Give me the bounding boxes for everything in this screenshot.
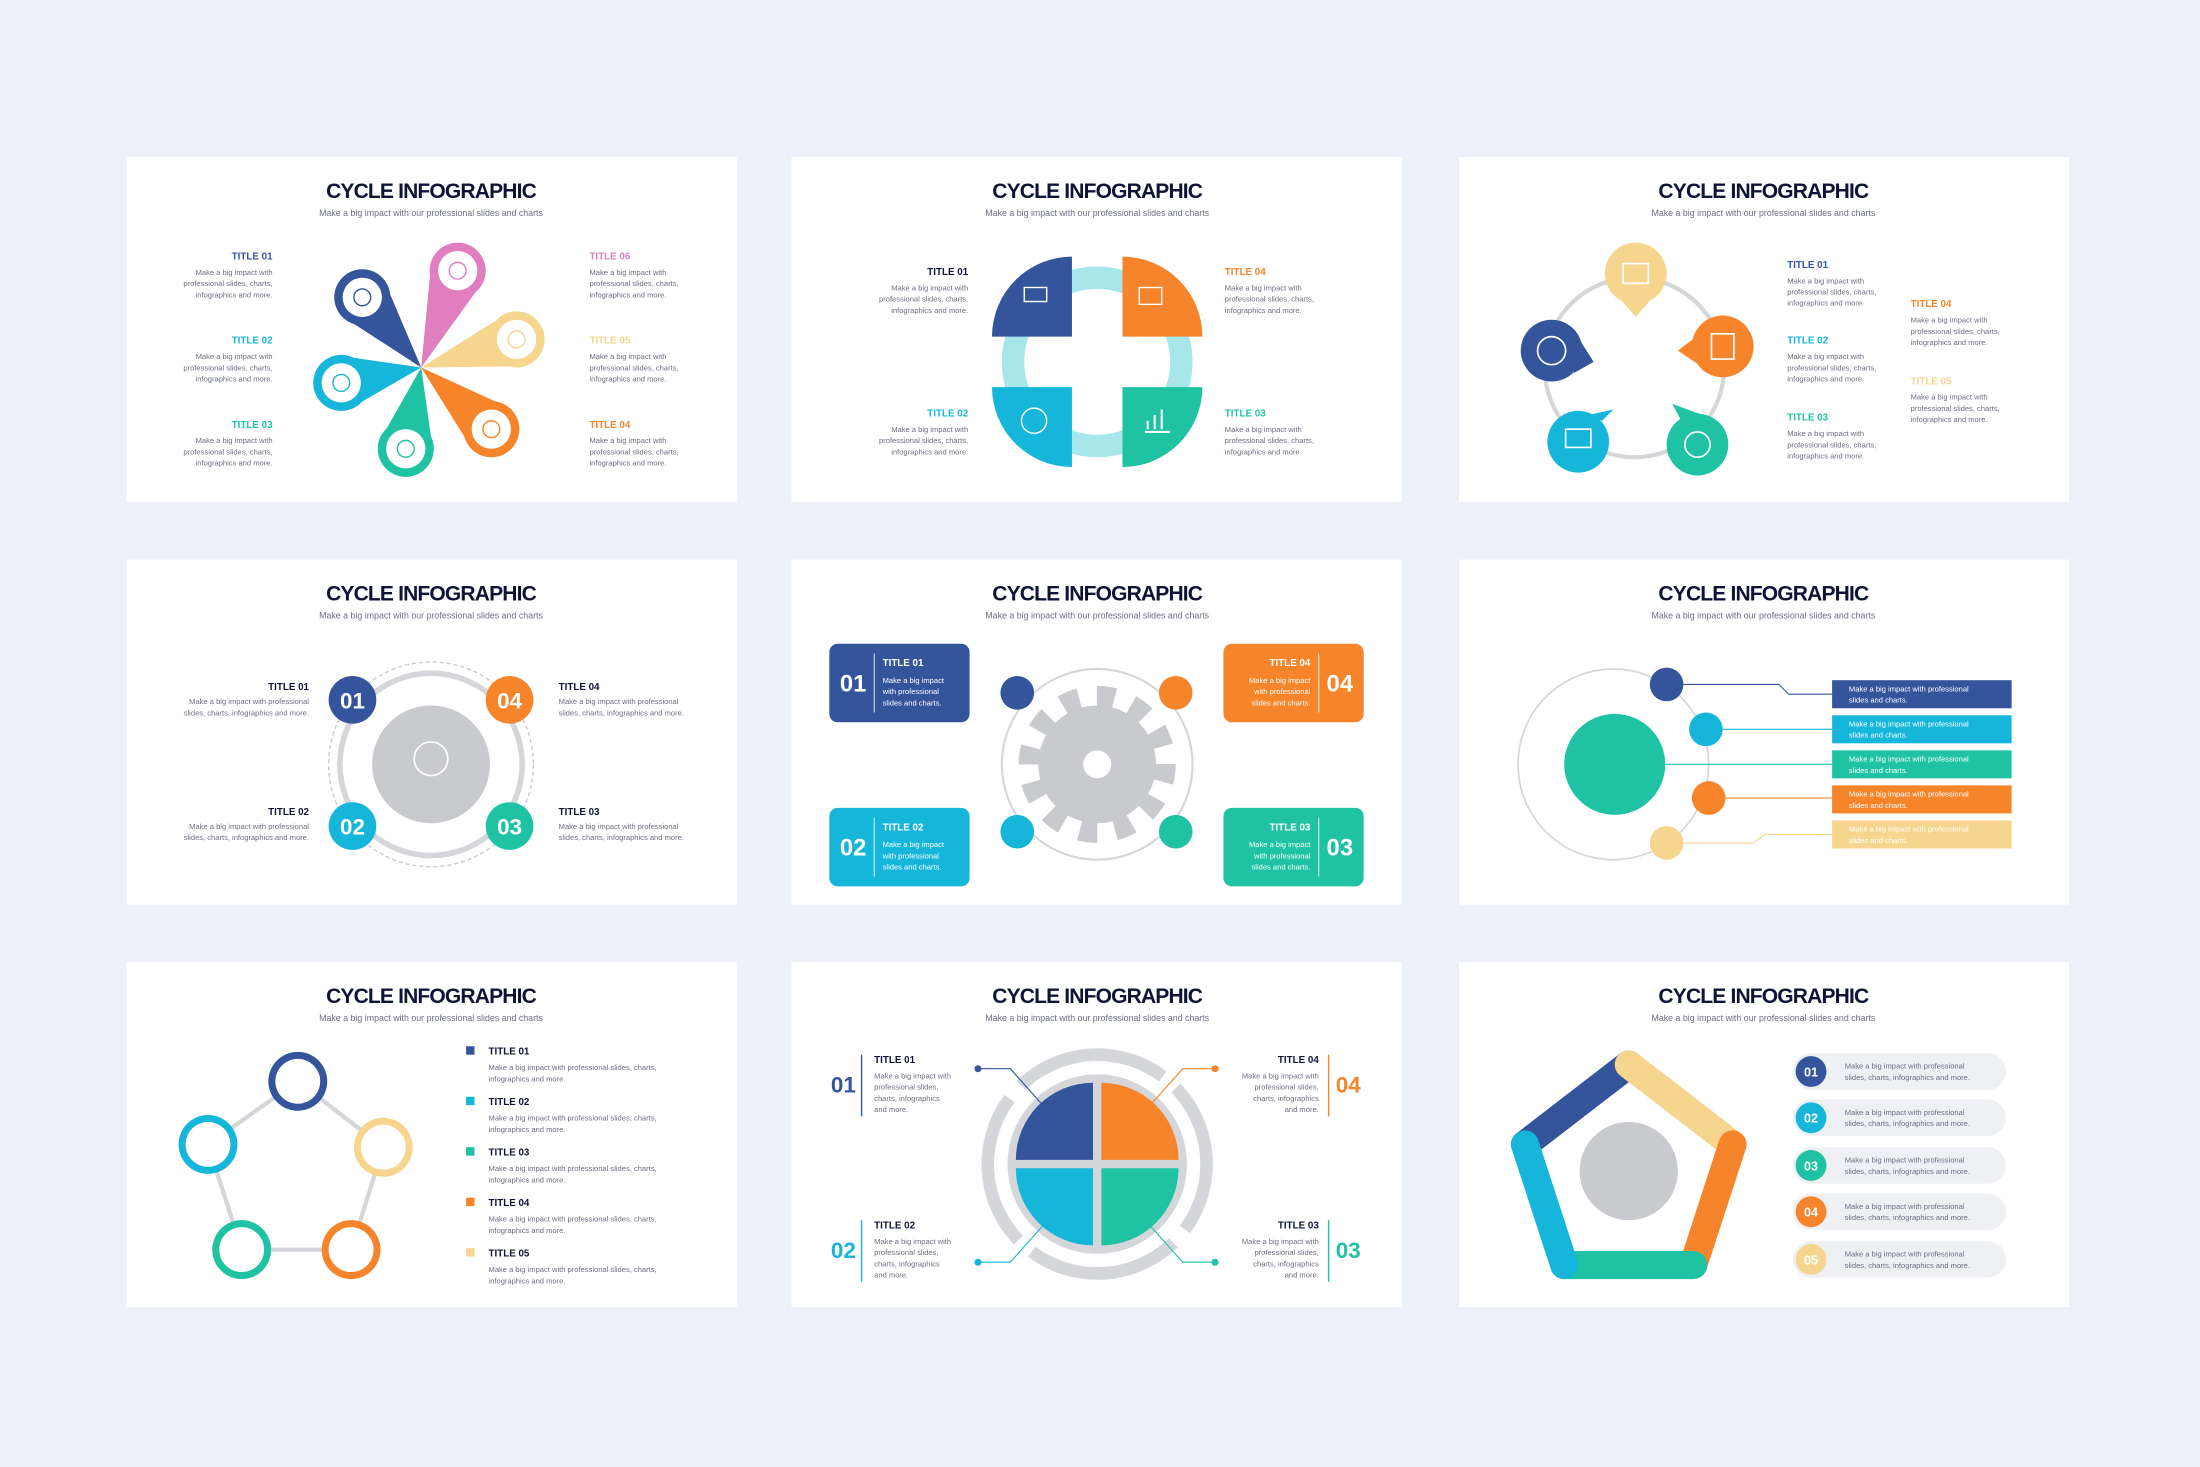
pill list: 03 bbox=[1804, 1159, 1818, 1173]
pill list: Make a big impact with professional bbox=[1845, 1202, 1965, 1211]
panel: slide 5 gear bbox=[791, 560, 1402, 905]
pill list: slides, charts, infographics and more. bbox=[1845, 1261, 1970, 1270]
text blocks: professional slides, charts, bbox=[1225, 295, 1314, 304]
text blocks: Make a big impact with bbox=[1242, 1237, 1319, 1246]
subtitle: Make a big impact with our professional slides and charts bbox=[985, 1013, 1210, 1023]
text blocks: Make a big impact with bbox=[874, 1237, 951, 1246]
text blocks: infographics and more. bbox=[891, 306, 968, 315]
box 01: slides and charts. bbox=[883, 698, 941, 707]
text blocks: professional slides, charts, bbox=[1911, 327, 2000, 336]
left text blocks bbox=[183, 251, 273, 468]
text blocks: TITLE 03 bbox=[1225, 409, 1266, 420]
text blocks: infographics and more. bbox=[891, 447, 968, 456]
right text blocks: infographics and more. bbox=[589, 459, 666, 468]
text blocks bbox=[831, 1055, 1361, 1282]
right text blocks: Make a big impact with bbox=[589, 352, 666, 361]
pill list: 01 bbox=[1804, 1065, 1818, 1079]
list: Make a big impact with professional slides, charts, bbox=[489, 1215, 657, 1224]
panel: slide 6 bars bbox=[1459, 560, 2069, 905]
pill list: slides, charts, infographics and more. bbox=[1845, 1119, 1970, 1128]
bars: slides and charts. bbox=[1849, 766, 1908, 775]
text blocks: TITLE 02 bbox=[927, 409, 969, 420]
pill list: 04 bbox=[1804, 1206, 1818, 1220]
title: CYCLE INFOGRAPHIC bbox=[1658, 985, 1869, 1008]
list: TITLE 03 bbox=[489, 1148, 530, 1159]
box 02: slides and charts. bbox=[883, 863, 941, 872]
text blocks: and more. bbox=[1285, 1271, 1319, 1280]
text blocks: professional slides, charts, bbox=[1911, 404, 2000, 413]
list: infographics and more. bbox=[489, 1175, 565, 1184]
text blocks: TITLE 04 bbox=[1225, 267, 1266, 278]
text blocks: slides, charts, infographics and more. bbox=[559, 833, 684, 842]
left text blocks: TITLE 02 bbox=[232, 336, 273, 347]
text blocks: TITLE 01 bbox=[927, 267, 969, 278]
box 04: 04 bbox=[1327, 670, 1354, 697]
left text blocks: infographics and more. bbox=[196, 459, 273, 468]
text blocks: professional slides, bbox=[1254, 1248, 1319, 1257]
list: Make a big impact with professional slides, charts, bbox=[489, 1164, 657, 1173]
list: infographics and more. bbox=[489, 1125, 565, 1134]
text blocks: TITLE 04 bbox=[1278, 1055, 1319, 1066]
circle diagram: 01 bbox=[340, 688, 365, 713]
text blocks: professional slides, charts, bbox=[1787, 440, 1876, 449]
box 04 bbox=[1223, 644, 1364, 722]
text blocks: and more. bbox=[874, 1105, 908, 1114]
right text blocks: professional slides, charts, bbox=[589, 447, 679, 456]
pentagon bbox=[179, 1052, 413, 1279]
panel: slide 9 pentagon ring bbox=[1459, 962, 2069, 1307]
bars: Make a big impact with professional bbox=[1849, 790, 1969, 799]
title: CYCLE INFOGRAPHIC bbox=[326, 985, 537, 1008]
list: TITLE 02 bbox=[489, 1097, 530, 1108]
list: infographics and more. bbox=[489, 1226, 565, 1235]
title: CYCLE INFOGRAPHIC bbox=[992, 180, 1203, 203]
text blocks: professional slides, bbox=[1254, 1083, 1319, 1092]
text blocks: TITLE 01 bbox=[874, 1055, 916, 1066]
left text blocks: Make a big impact with bbox=[196, 436, 273, 445]
box 04: TITLE 04 bbox=[1270, 658, 1311, 669]
right text blocks: Make a big impact with bbox=[589, 436, 666, 445]
text blocks: Make a big impact with bbox=[1787, 429, 1864, 438]
box 03: slides and charts. bbox=[1252, 863, 1310, 872]
pill list: slides, charts, infographics and more. bbox=[1845, 1167, 1970, 1176]
text blocks: professional slides, charts, bbox=[879, 295, 968, 304]
bars: Make a big impact with professional bbox=[1849, 825, 1969, 834]
left text blocks: Make a big impact with bbox=[196, 268, 273, 277]
gear bbox=[1000, 669, 1193, 860]
bars: slides and charts. bbox=[1849, 801, 1908, 810]
circle diagram: 04 bbox=[497, 688, 523, 713]
text blocks: 04 bbox=[1336, 1073, 1361, 1098]
box 03: Make a big impact bbox=[1249, 840, 1311, 849]
subtitle: Make a big impact with our professional slides and charts bbox=[1651, 1013, 1876, 1023]
text blocks: professional slides, charts, bbox=[1787, 288, 1876, 297]
text blocks: Make a big impact with bbox=[891, 283, 968, 292]
text blocks: charts, infographics bbox=[1253, 1259, 1319, 1268]
bars: Make a big impact with professional bbox=[1849, 755, 1969, 764]
pentagon ring bbox=[1525, 1064, 1733, 1265]
pill list: slides, charts, infographics and more. bbox=[1845, 1213, 1970, 1222]
list: Make a big impact with professional slides, charts, bbox=[489, 1063, 657, 1072]
pill list: 02 bbox=[1804, 1112, 1818, 1126]
subtitle: Make a big impact with our professional slides and charts bbox=[319, 1013, 543, 1023]
right text blocks: Make a big impact with bbox=[589, 268, 666, 277]
right text blocks: TITLE 05 bbox=[589, 336, 631, 347]
right text blocks: infographics and more. bbox=[589, 290, 666, 299]
text blocks: Make a big impact with bbox=[874, 1072, 951, 1081]
list bbox=[466, 1046, 657, 1285]
left text blocks: TITLE 03 bbox=[232, 420, 273, 431]
box 04: Make a big impact bbox=[1249, 676, 1311, 685]
text blocks: TITLE 02 bbox=[1787, 336, 1829, 347]
text blocks: TITLE 01 bbox=[268, 682, 310, 693]
box 02: Make a big impact bbox=[883, 840, 945, 849]
pill list: Make a big impact with professional bbox=[1845, 1062, 1965, 1071]
text blocks: TITLE 04 bbox=[559, 682, 600, 693]
title: CYCLE INFOGRAPHIC bbox=[992, 985, 1203, 1008]
text blocks: infographics and more. bbox=[1225, 447, 1302, 456]
text blocks: TITLE 03 bbox=[1787, 413, 1829, 424]
left text blocks: Make a big impact with bbox=[196, 352, 273, 361]
text blocks: Make a big impact with bbox=[1911, 316, 1988, 325]
circle diagram: 03 bbox=[497, 814, 522, 839]
text blocks: TITLE 02 bbox=[268, 807, 310, 818]
subtitle: Make a big impact with our professional slides and charts bbox=[1651, 208, 1876, 218]
pill list: slides, charts, infographics and more. bbox=[1845, 1073, 1970, 1082]
right text blocks: professional slides, charts, bbox=[589, 279, 679, 288]
text blocks: TITLE 02 bbox=[874, 1221, 916, 1232]
text blocks: infographics and more. bbox=[1911, 415, 1988, 424]
box 01 bbox=[829, 644, 970, 722]
text blocks: slides, charts, infographics and more. bbox=[184, 708, 309, 717]
text blocks: professional slides, charts, bbox=[1787, 363, 1876, 372]
text blocks: infographics and more. bbox=[1225, 306, 1302, 315]
title: CYCLE INFOGRAPHIC bbox=[1658, 180, 1869, 203]
title: CYCLE INFOGRAPHIC bbox=[992, 582, 1203, 605]
pill list: Make a big impact with professional bbox=[1845, 1250, 1965, 1259]
text blocks: 02 bbox=[831, 1238, 856, 1263]
bars: slides and charts. bbox=[1849, 696, 1908, 705]
text blocks: and more. bbox=[1285, 1105, 1319, 1114]
text blocks: charts, infographics bbox=[874, 1259, 940, 1268]
box 04: slides and charts. bbox=[1252, 698, 1310, 707]
right text blocks: infographics and more. bbox=[589, 374, 666, 383]
box 01: 01 bbox=[840, 670, 866, 697]
pill list: Make a big impact with professional bbox=[1845, 1108, 1965, 1117]
text blocks: professional slides, charts, bbox=[879, 436, 968, 445]
pill list: 05 bbox=[1804, 1253, 1818, 1267]
list: Make a big impact with professional slides, charts, bbox=[489, 1265, 657, 1274]
pill list: Make a big impact with professional bbox=[1845, 1156, 1965, 1165]
text blocks: TITLE 03 bbox=[559, 807, 600, 818]
panel: slide 3 ring nodes bbox=[1459, 157, 2069, 502]
left text blocks: professional slides, charts, bbox=[183, 447, 273, 456]
box 03: 03 bbox=[1327, 835, 1353, 862]
text blocks: Make a big impact with professional bbox=[189, 822, 309, 831]
bars: Make a big impact with professional bbox=[1849, 719, 1969, 728]
subtitle: Make a big impact with our professional slides and charts bbox=[1651, 610, 1876, 620]
bars bbox=[1832, 680, 2012, 849]
panel: slide 2 quarters bbox=[791, 157, 1402, 502]
list: TITLE 04 bbox=[489, 1198, 530, 1209]
circle diagram bbox=[1518, 668, 1832, 860]
text blocks: Make a big impact with bbox=[891, 425, 968, 434]
left text blocks: professional slides, charts, bbox=[183, 363, 273, 372]
left text blocks: TITLE 01 bbox=[232, 251, 273, 262]
text blocks: Make a big impact with professional bbox=[559, 822, 679, 831]
text blocks: TITLE 03 bbox=[1278, 1221, 1319, 1232]
text blocks: professional slides, charts, bbox=[1225, 436, 1314, 445]
subtitle: Make a big impact with our professional slides and charts bbox=[985, 208, 1210, 218]
box 02: 02 bbox=[840, 835, 866, 862]
text blocks: Make a big impact with bbox=[1225, 283, 1302, 292]
text blocks: TITLE 01 bbox=[1787, 260, 1829, 271]
box 01: TITLE 01 bbox=[883, 658, 924, 669]
text blocks: 03 bbox=[1336, 1238, 1361, 1263]
text blocks: infographics and more. bbox=[1787, 299, 1864, 308]
text blocks: professional slides, bbox=[874, 1248, 939, 1257]
pill list bbox=[1793, 1053, 2006, 1278]
title: CYCLE INFOGRAPHIC bbox=[326, 582, 537, 605]
text blocks: Make a big impact with bbox=[1787, 276, 1864, 285]
text blocks: charts, infographics bbox=[874, 1094, 940, 1103]
box 03: TITLE 03 bbox=[1270, 822, 1311, 833]
list: Make a big impact with professional slides, charts, bbox=[489, 1114, 657, 1123]
text blocks: infographics and more. bbox=[1787, 452, 1864, 461]
ring chart bbox=[992, 257, 1202, 467]
text blocks: charts, infographics bbox=[1253, 1094, 1319, 1103]
bars: slides and charts. bbox=[1849, 836, 1908, 845]
text blocks: TITLE 05 bbox=[1911, 376, 1952, 387]
text blocks bbox=[879, 267, 1314, 456]
box 03: with professional bbox=[1253, 851, 1311, 860]
panel: slide 4 numbered circle bbox=[127, 560, 737, 905]
text blocks: Make a big impact with professional bbox=[559, 697, 679, 706]
node ring bbox=[1521, 243, 1754, 475]
title: CYCLE INFOGRAPHIC bbox=[326, 180, 537, 203]
text blocks: Make a big impact with bbox=[1225, 425, 1302, 434]
subtitle: Make a big impact with our professional slides and charts bbox=[319, 208, 543, 218]
list: infographics and more. bbox=[489, 1074, 565, 1083]
right text blocks: TITLE 04 bbox=[589, 420, 631, 431]
bars: Make a big impact with professional bbox=[1849, 684, 1969, 693]
text blocks: Make a big impact with bbox=[1911, 393, 1988, 402]
text blocks bbox=[1787, 260, 2000, 461]
box 02: TITLE 02 bbox=[883, 822, 924, 833]
list: TITLE 05 bbox=[489, 1249, 530, 1260]
subtitle: Make a big impact with our professional slides and charts bbox=[319, 610, 543, 620]
text blocks: infographics and more. bbox=[1787, 374, 1864, 383]
text blocks: 01 bbox=[831, 1073, 856, 1098]
text blocks: TITLE 04 bbox=[1911, 299, 1952, 310]
box 02 bbox=[829, 808, 970, 886]
panel: slide 1 petals bbox=[127, 157, 737, 502]
petal flower bbox=[313, 243, 545, 477]
box 01: Make a big impact bbox=[883, 676, 945, 685]
text blocks: Make a big impact with professional bbox=[189, 697, 309, 706]
text blocks: professional slides, bbox=[874, 1083, 939, 1092]
list: TITLE 01 bbox=[489, 1047, 530, 1058]
panel: slide 8 quadrant circle bbox=[791, 962, 1402, 1307]
right text blocks: professional slides, charts, bbox=[589, 363, 679, 372]
title: CYCLE INFOGRAPHIC bbox=[1658, 582, 1869, 605]
right text blocks bbox=[589, 251, 679, 468]
right text blocks: TITLE 06 bbox=[589, 251, 631, 262]
circle diagram bbox=[329, 662, 533, 867]
text blocks: Make a big impact with bbox=[1787, 352, 1864, 361]
left text blocks: professional slides, charts, bbox=[183, 279, 273, 288]
left text blocks: infographics and more. bbox=[196, 374, 273, 383]
box 01: with professional bbox=[882, 687, 939, 696]
text blocks: and more. bbox=[874, 1271, 908, 1280]
panel: slide 7 pentagon nodes bbox=[127, 962, 737, 1307]
circle diagram: 02 bbox=[340, 814, 365, 839]
box 03 bbox=[1223, 808, 1364, 886]
subtitle: Make a big impact with our professional slides and charts bbox=[985, 610, 1210, 620]
list: infographics and more. bbox=[489, 1276, 565, 1285]
text blocks: slides, charts, infographics and more. bbox=[559, 708, 684, 717]
text blocks: Make a big impact with bbox=[1242, 1072, 1319, 1081]
quadrant chart bbox=[974, 1055, 1219, 1273]
text blocks: infographics and more. bbox=[1911, 338, 1988, 347]
box 02: with professional bbox=[882, 851, 939, 860]
box 04: with professional bbox=[1253, 687, 1311, 696]
text blocks: slides, charts, infographics and more. bbox=[184, 833, 309, 842]
left text blocks: infographics and more. bbox=[196, 290, 273, 299]
bars: slides and charts. bbox=[1849, 731, 1908, 740]
text blocks bbox=[184, 682, 684, 842]
